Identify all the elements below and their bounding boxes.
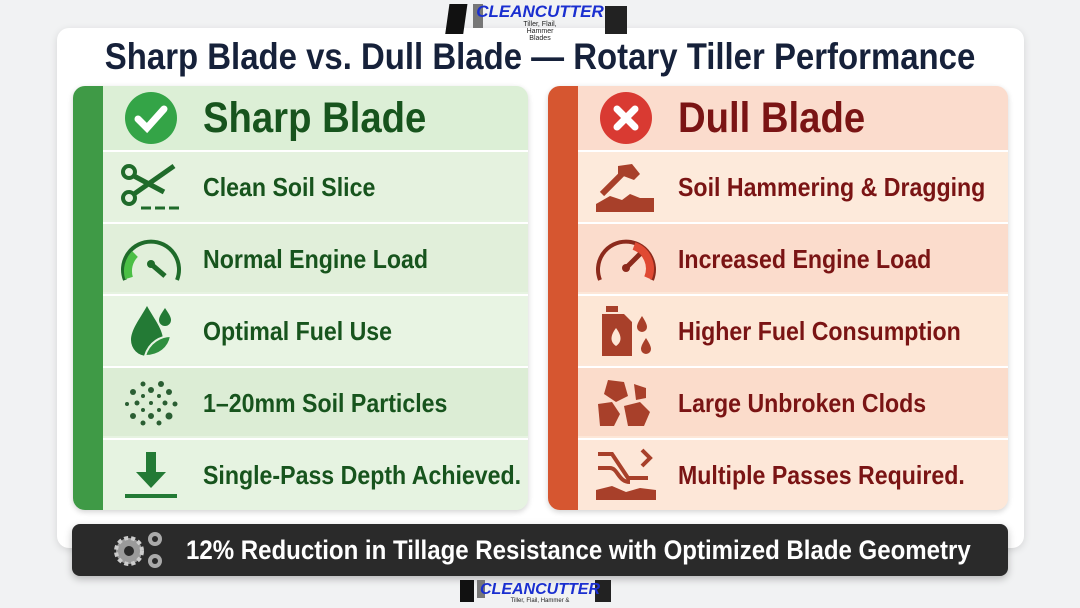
row: clean soil slice [103,150,528,220]
row: optimal fuel use: Optimal Fuel Use [203,316,392,346]
banner [72,524,1008,576]
row: soil particles: 1–20mm Soil Particles [203,388,447,418]
icon: gears [114,532,162,568]
logo bottom [460,580,611,603]
row: normal engine load: Normal Engine Load [203,244,428,274]
logo bottom: CLEANCUTTER [480,581,600,598]
row: optimal fuel use [103,294,528,364]
row: single pass: Single-Pass Depth Achieved. [203,460,521,490]
row: clean soil slice: Clean Soil Slice [203,172,375,202]
row: single pass [103,438,528,510]
heading: sharp blade [103,86,528,150]
logo top: Tiller, Flail, [523,21,557,28]
row: fuel consumption [578,294,1008,364]
row: soil hammering: Soil Hammering & Dragging [678,172,985,202]
panel: sharp blade [73,86,528,510]
row: multiple passes: Multiple Passes Required. [678,460,965,490]
row: increased engine load [578,222,1008,292]
row: normal engine load [103,222,528,292]
logo top: Hammer [527,28,554,35]
row: fuel consumption: Higher Fuel Consumption [678,316,961,346]
row: increased engine load: Increased Engine Load [678,244,931,274]
logo top [445,2,627,40]
white card [57,28,1024,548]
title: Sharp Blade vs. Dull Blade — Rotary Tiller Performance [105,36,975,77]
row: soil particles [103,366,528,436]
heading: dull blade: Dull Blade [678,94,865,142]
logo top: CLEANCUTTER [476,2,604,21]
heading: dull blade [578,86,1008,150]
row: large clods [578,366,1008,436]
row: large clods: Large Unbroken Clods [678,388,926,418]
heading: sharp blade: Sharp Blade [203,94,426,142]
banner text: 12% Reduction in Tillage Resistance with Optimized Blade Geometry [186,535,971,565]
panel: dull blade [548,86,1008,510]
row: multiple passes [578,438,1008,510]
row: soil hammering [578,150,1008,220]
